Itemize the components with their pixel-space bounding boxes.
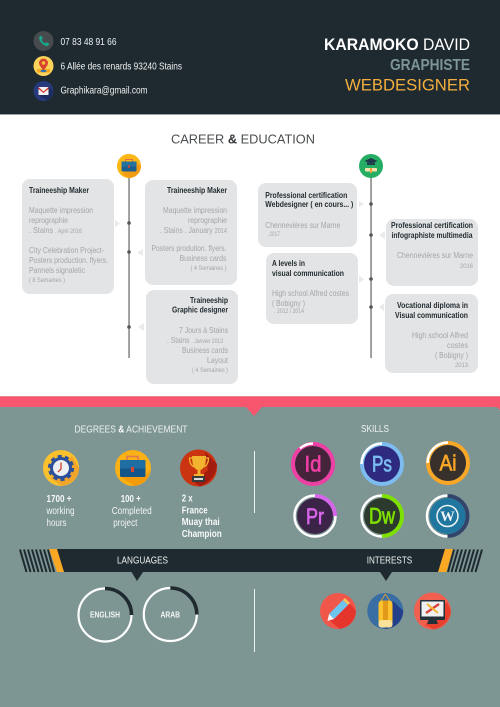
card: vocational diploma: costes [447,340,468,350]
card: a levels [266,253,358,324]
card: traineeship maker left: Posters production. flyers. [29,255,108,265]
arrows: career [115,220,144,331]
icon: Illustrator [428,442,468,483]
card: graphic designer: Traineeship [190,295,228,305]
job title: webdesigner: WEBDESIGNER [345,77,470,95]
stat: hours: hours [46,518,66,529]
icon: Illustrator: Ai [440,450,456,476]
divider [254,451,255,513]
card: infographiste certification: 2016 [460,263,473,270]
stat: hours: 1700 + [46,494,72,505]
card: graphic designer: Graphic designer [172,304,229,314]
card: webdesigner certification: Chennevières sur Marne [265,220,340,230]
card: a levels: . 2012 / 2014 [274,308,304,315]
timeline: career [127,176,131,358]
career heading: CAREER & EDUCATION [171,132,315,146]
arrows: education [359,201,385,311]
card: traineeship maker left: reprographie [29,215,68,225]
card: traineeship maker left: Traineeship Maker [29,185,90,195]
card: traineeship maker left: City Celebration Project- [29,245,104,255]
card: infographiste certification: Chennevières sur Marne [397,250,473,260]
contact phone: 07 83 48 91 66 [60,37,117,48]
card: traineeship maker right [145,180,237,285]
card: traineeship maker right: Business cards [180,253,226,263]
pink pointer [246,407,262,416]
stat: projects: project [113,518,137,529]
card: infographiste certification [386,219,478,286]
icon: phone [34,31,54,51]
card: graphic designer: Layout [207,355,228,365]
card: graphic designer: ( 4 Semaines ) [192,367,228,374]
icon: Dreamweaver: Dw [369,504,395,528]
language ring: english: ENGLISH [90,610,120,620]
card: infographiste certification: Professional certification [391,220,473,230]
card: traineeship maker left: Pannels signaletic [29,265,86,275]
icon: Photoshop: Ps [372,452,392,476]
card: vocational diploma [385,294,478,373]
card: vocational diploma: ( Bobigny ) [435,350,468,360]
language ring: arab [144,588,197,641]
card: graphic designer [146,290,238,384]
card: infographiste certification: infographiste multimedia [392,230,473,240]
stat: champion: Muay thai [182,517,220,528]
card: a levels: visual communication [272,268,344,278]
icon: trophy [180,450,217,486]
header band [0,0,500,115]
card: traineeship maker right: Maquette impression [163,205,227,215]
stat: projects [112,494,152,529]
stat: champion: Champion [182,529,222,540]
icon: Premiere [294,496,336,536]
name: KARAMOKO DAVID [324,35,470,54]
card: traineeship maker right: Posters prodution. flyers. [152,243,226,253]
icon: briefcase timeline [117,154,141,178]
banner [20,549,482,572]
card: traineeship maker left: ( 8 Semaines ) [29,277,65,284]
teal lower panel [0,407,500,707]
card: webdesigner certification [258,183,357,247]
icon: mail [34,81,54,101]
card: graphic designer: . Stains . Janvier 2013 [167,335,223,345]
card: traineeship maker left: Maquette impression [29,205,93,215]
icon: WordPress [427,496,468,536]
icon: briefcase [115,450,151,486]
stat: champion: France [182,505,208,516]
card: traineeship maker left [22,179,114,294]
card: webdesigner certification: Professional certification [265,190,347,200]
card: a levels: ( Bobigny ) [272,298,305,308]
pink band [0,396,500,410]
card: vocational diploma: High school Alfred [412,330,468,340]
card: traineeship maker right: Traineeship Maker [167,185,228,195]
stat: champion [182,494,222,540]
card: traineeship maker left: . Stains . April 2016 [29,225,82,235]
icon: monitor design [414,592,451,630]
card: vocational diploma: Visual communication [395,310,468,320]
icon: WordPress: W [440,509,455,525]
stat: projects: 100 + [121,494,141,505]
interests pointer [380,572,392,581]
icon: InDesign: Id [304,452,322,476]
stat: hours: working [46,506,74,517]
stat: projects: Completed [112,506,152,517]
card: webdesigner certification: Webdesigner ( en cours... ) [265,199,353,209]
contact email: Graphikara@gmail.com [60,86,148,96]
contact address: 6 Allée des renards 93240 Stains [60,62,182,72]
languages heading: LANGUAGES [117,556,168,566]
stat: champion: 2 x [182,494,193,505]
interests heading: INTERESTS [367,556,413,566]
card: traineeship maker right: . Stains . January 2014 [160,225,227,235]
icon: gear clock [43,450,79,486]
language ring: arab: ARAB [161,610,180,620]
card: a levels: A levels in [272,258,305,268]
card: webdesigner certification: . 2017 [266,231,280,238]
timeline: education [369,176,373,358]
degrees heading: DEGREES & ACHIEVEMENT [74,424,188,436]
card: vocational diploma: Vocational diploma in [397,300,468,310]
card: traineeship maker right: reprographie [188,215,227,225]
divider [254,589,255,652]
icon: Premiere: Pr [306,504,324,529]
icon: Photoshop [362,444,402,484]
icon: InDesign [293,444,333,484]
icon: pencil [320,593,356,629]
card: traineeship maker right: ( 4 Semaines ) [190,265,226,272]
icon: punching bag [367,593,403,629]
icon: Dreamweaver [362,496,402,536]
icon: map pin [34,56,54,76]
language ring: english [78,588,132,642]
skills heading: SKILLS [361,424,389,435]
card: graphic designer: Business cards [182,345,228,355]
icon: graduation timeline [359,154,383,178]
stat: hours [46,494,74,529]
card: graphic designer: 7 Jours à Stains [179,325,228,335]
job title: graphiste: GRAPHISTE [390,57,470,74]
card: a levels: High school Alfred costes [272,288,349,298]
card: vocational diploma: 2013 [455,362,468,369]
languages pointer [132,572,143,581]
